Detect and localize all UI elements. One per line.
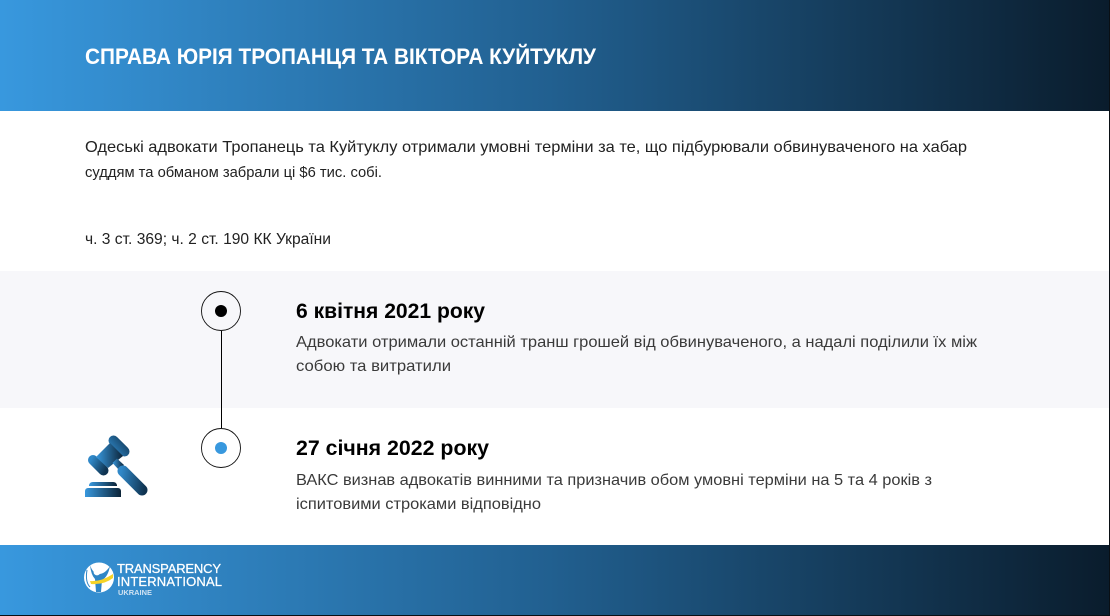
event: 6 April 2021	[296, 299, 977, 375]
logo: Transparency International Ukraine	[84, 561, 222, 597]
event: 27 January 2022: ВАКС визнав адвокатів винними та призначив обом умовні терміни на 5 та 4 років з	[296, 472, 932, 489]
intro text: суддям та обманом забрали ці $6 тис. собі.	[85, 164, 382, 181]
event: 27 January 2022: іспитовими строками відповідно	[296, 496, 541, 513]
logo: Transparency International Ukraine: TRANSPARENCY	[117, 561, 221, 576]
logo: Transparency International Ukraine: UKRAINE	[118, 590, 152, 597]
header band	[0, 0, 1110, 111]
event: 6 April 2021: 6 квітня 2021 року	[296, 299, 485, 323]
event: 6 April 2021: Адвокати отримали останній транш грошей від обвинуваченого, а надалі поділили їх між	[296, 334, 977, 351]
intro text: Одеські адвокати Тропанець та Куйтуклу отримали умовні терміни за те, що підбурювали обвинуваченого на хабар	[85, 139, 967, 156]
title: СПРАВА ЮРІЯ ТРОПАНЦЯ ТА ВІКТОРА КУЙТУКЛУ	[85, 44, 596, 69]
legal citation: ч. 3 ст. 369; ч. 2 ст. 190 КК України	[85, 231, 331, 248]
timeline connector	[220, 331, 222, 428]
event: 6 April 2021: собою та витратили	[296, 358, 451, 375]
timeline marker: 6 April 2021	[202, 292, 240, 330]
icon: gavel	[85, 440, 142, 497]
logo: Transparency International Ukraine: INTERNATIONAL	[117, 574, 222, 589]
timeline marker: 27 January 2022	[202, 428, 240, 468]
event: 27 January 2022	[296, 436, 932, 513]
event: 27 January 2022: 27 січня 2022 року	[296, 436, 489, 460]
intro text	[85, 139, 967, 181]
footer band	[0, 545, 1110, 616]
panel: first event background	[0, 271, 1110, 408]
